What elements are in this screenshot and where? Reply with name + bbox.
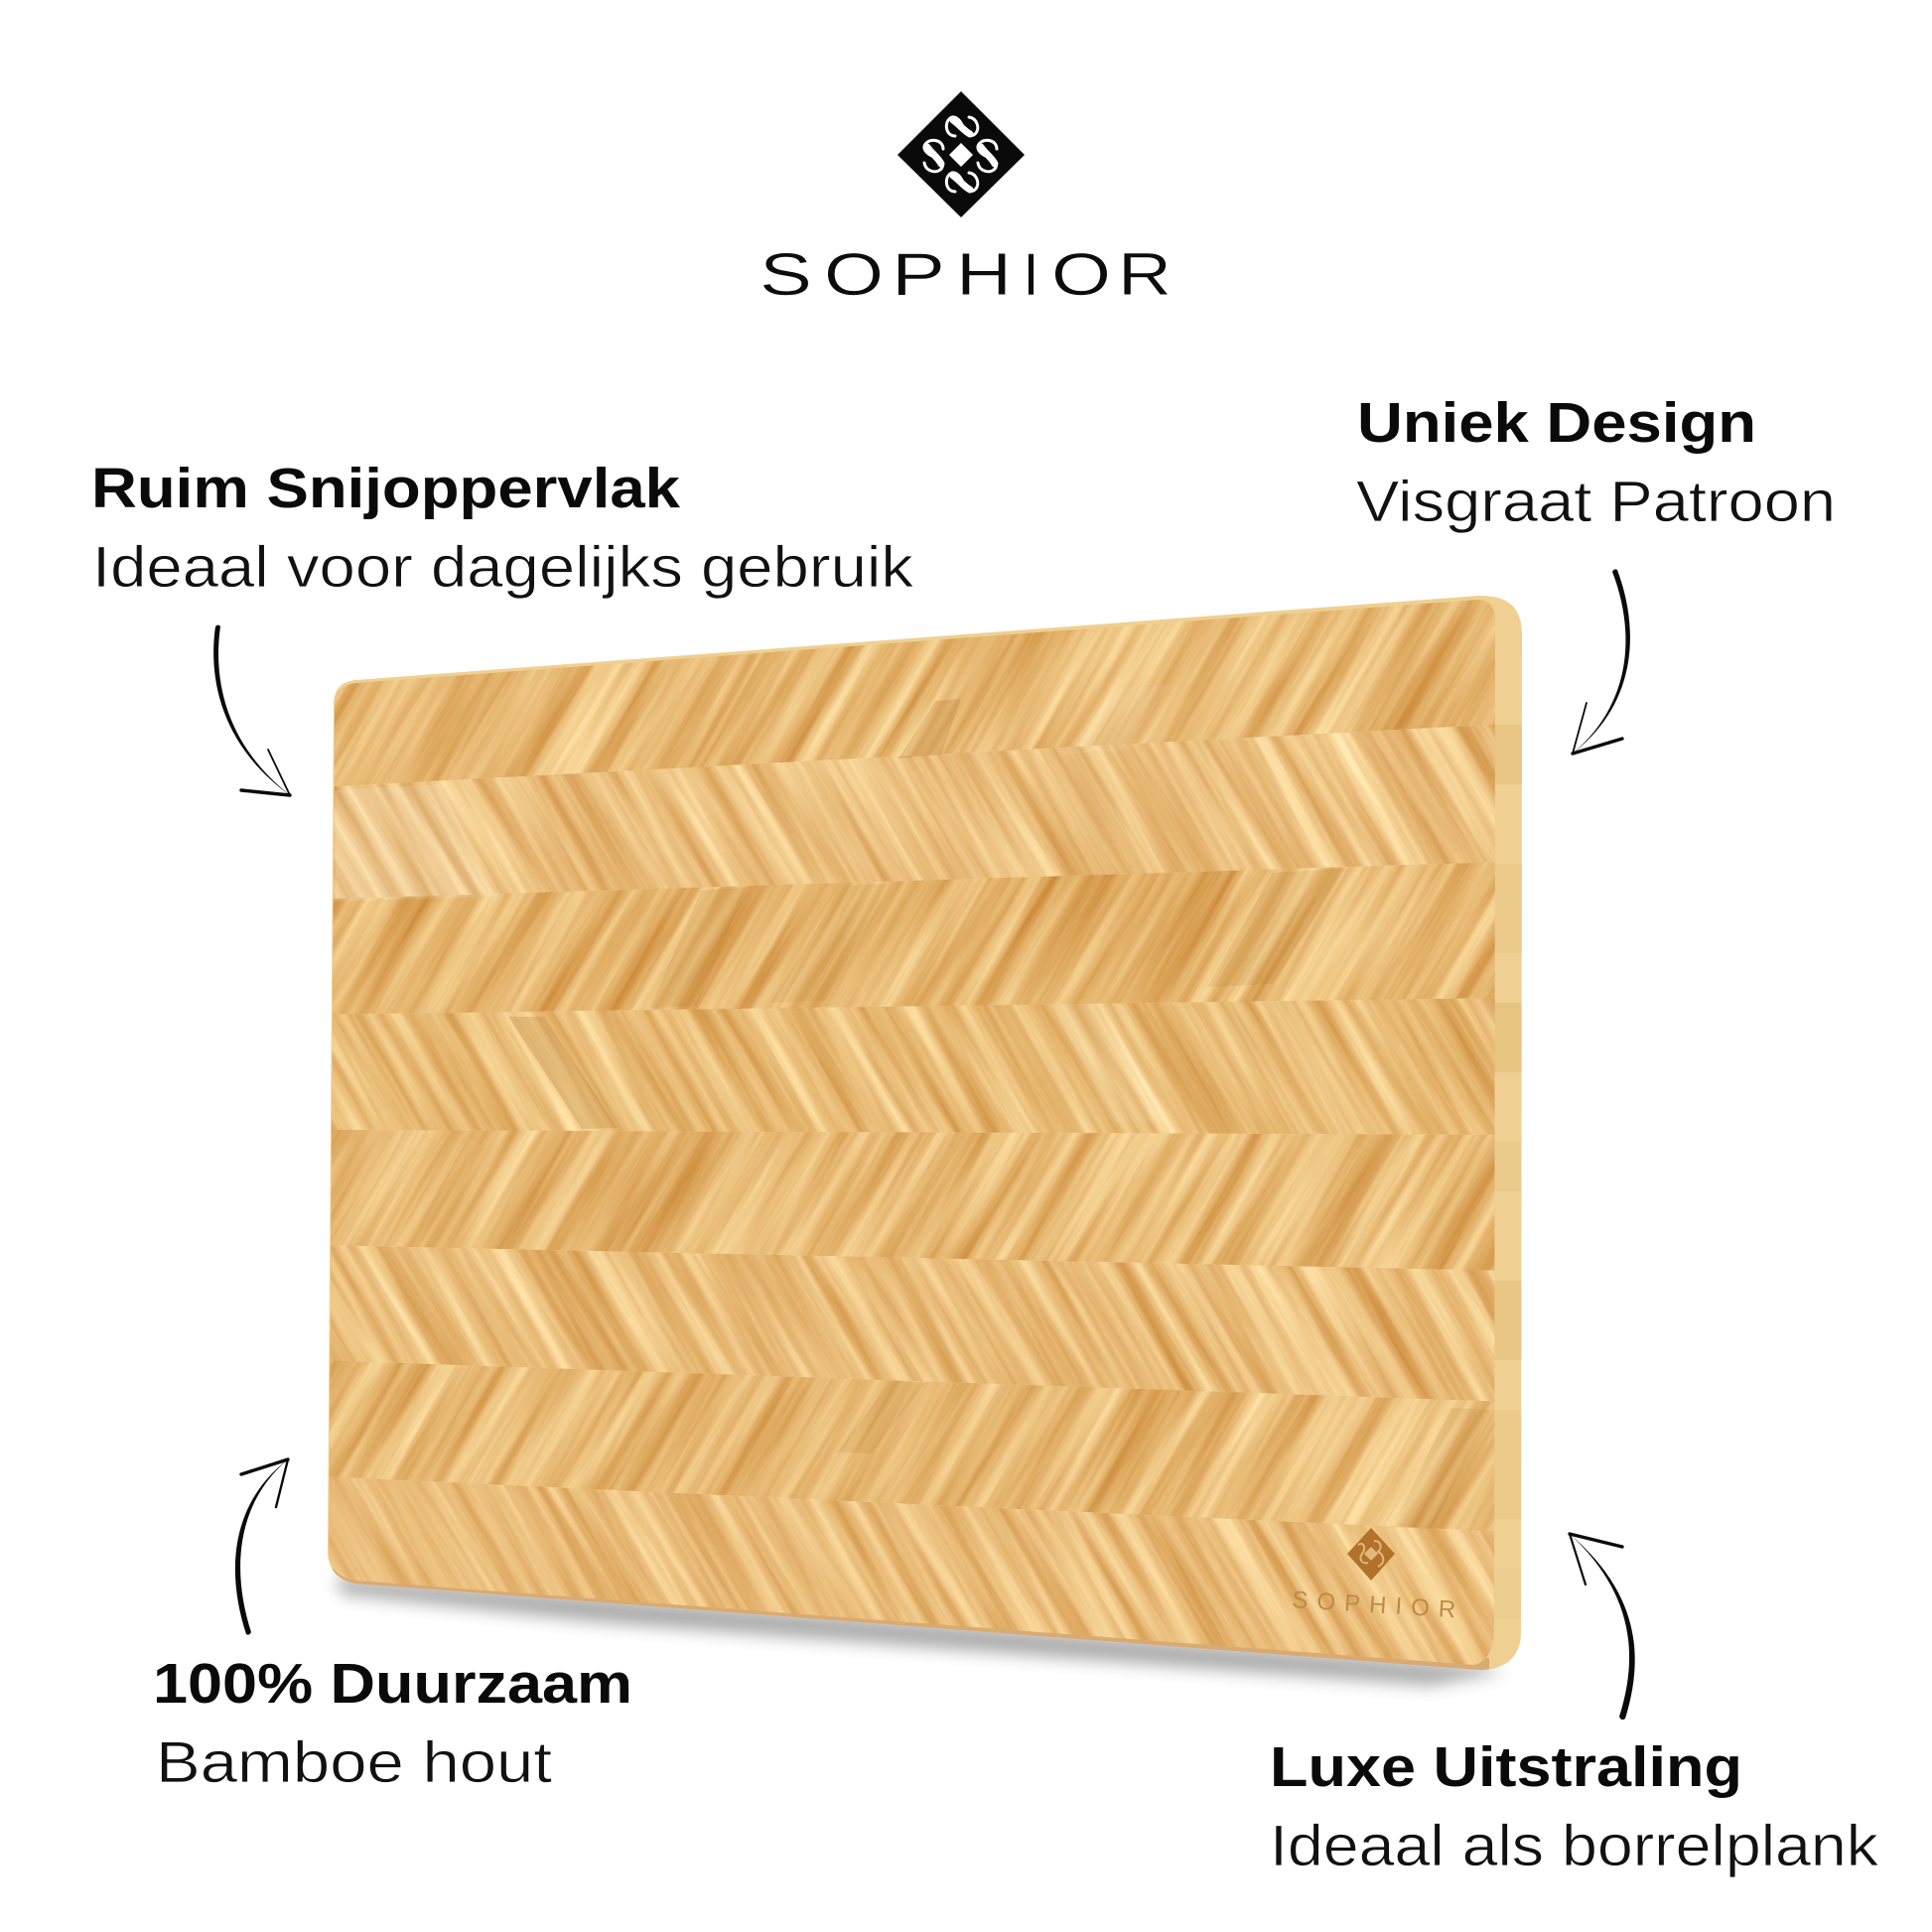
logo wordmark bbox=[759, 241, 1172, 308]
heading: Ruim Snijoppervlak bbox=[91, 457, 681, 519]
heading: Luxe Uitstraling bbox=[1270, 1735, 1742, 1798]
board shadow bbox=[336, 1577, 1504, 1686]
row 4 bbox=[318, 998, 1509, 1135]
callout: Uniek Design bbox=[1356, 391, 1836, 534]
text block: Ideaal als borrelplank bbox=[1270, 1814, 1879, 1878]
text block: Ideaal voor dagelijks gebruik bbox=[92, 535, 914, 600]
logo wordmark: S bbox=[759, 241, 812, 308]
callout: Luxe Uitstraling bbox=[1270, 1735, 1879, 1878]
row 1 bbox=[318, 586, 1509, 787]
logo: Sophior bbox=[759, 91, 1172, 308]
heading: Uniek Design bbox=[1357, 391, 1756, 454]
logo wordmark: H bbox=[956, 241, 1012, 308]
row 2 bbox=[318, 724, 1509, 899]
row 3 bbox=[318, 862, 1509, 1015]
row 5 bbox=[318, 1130, 1509, 1271]
icon: diamond emblem bbox=[897, 91, 1025, 217]
cutting board bbox=[318, 586, 1534, 1686]
arrow: Uniek Design bbox=[1573, 569, 1630, 754]
logo wordmark: I bbox=[1023, 241, 1039, 308]
row 8 bbox=[318, 1476, 1509, 1678]
logo wordmark: O bbox=[1051, 241, 1111, 308]
logo wordmark: O bbox=[824, 241, 884, 308]
board edge bbox=[318, 586, 1534, 1678]
callout: Ruim Snijoppervlak bbox=[91, 457, 914, 600]
callout: 100% Duurzaam bbox=[153, 1652, 632, 1795]
arrow: Luxe Uitstraling bbox=[1570, 1534, 1635, 1720]
tone patches bbox=[336, 685, 1491, 1529]
row 7 bbox=[318, 1360, 1509, 1532]
arrow: 100% Duurzaam bbox=[235, 1459, 288, 1635]
engraved logo on board bbox=[1292, 1528, 1456, 1623]
text block: Bamboe hout bbox=[156, 1730, 552, 1795]
row 6 bbox=[318, 1245, 1509, 1402]
engraved wordmark: SOPHIOR bbox=[1292, 1587, 1456, 1623]
text block: Visgraat Patroon bbox=[1356, 470, 1836, 534]
heading: 100% Duurzaam bbox=[153, 1652, 632, 1715]
board face: herringbone rows bbox=[318, 586, 1509, 1678]
logo wordmark: P bbox=[892, 241, 945, 308]
icon: engraved diamond bbox=[1347, 1528, 1395, 1581]
logo wordmark: R bbox=[1118, 241, 1172, 308]
arrow: Ruim Snijoppervlak bbox=[213, 625, 290, 795]
